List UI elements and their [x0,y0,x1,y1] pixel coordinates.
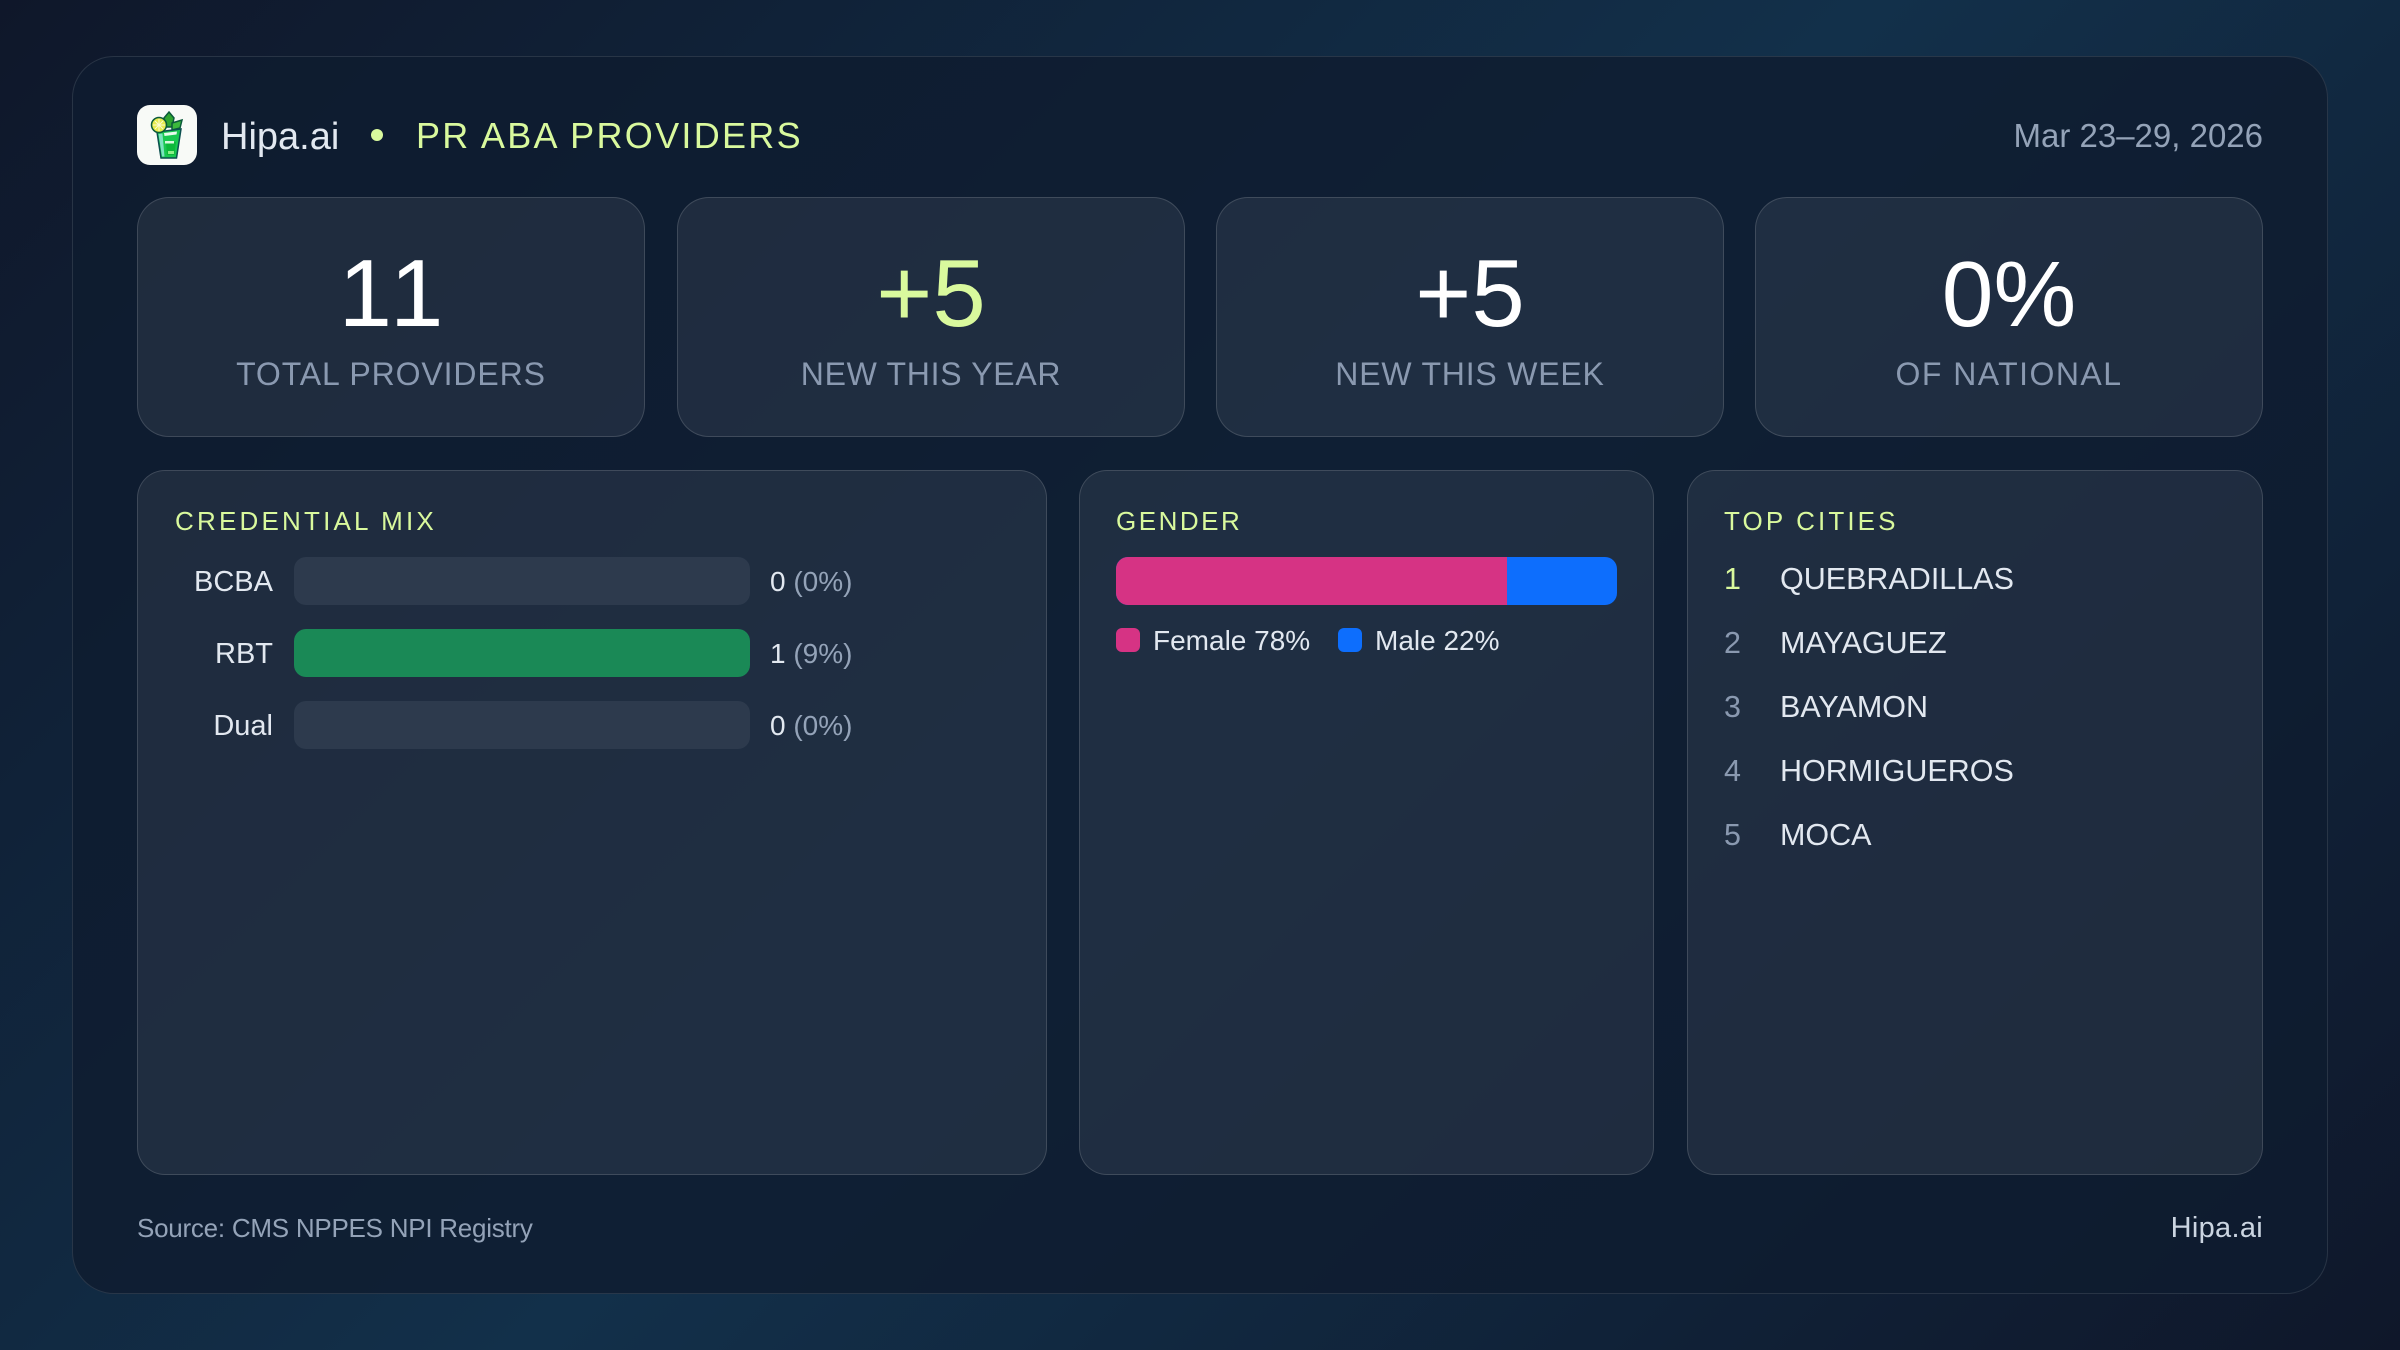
label: NEW THIS WEEK [1335,356,1605,392]
KPI: new this year [677,197,1185,437]
panel: credential mix [137,470,1047,1175]
bar row: Dual: Dual [213,710,273,742]
value: +5 [1415,240,1525,347]
heading: top cities: TOP CITIES [1724,506,1899,536]
city list [1724,562,2014,852]
city 3: 3 [1724,690,1741,724]
bar row: BCBA: 0 (0%) [770,566,852,597]
panel: gender [1079,470,1654,1175]
KPI: total providers [137,197,645,437]
city 2: 2 [1724,626,1741,660]
footer brand: Hipa.ai [2171,1212,2263,1244]
bar row: Dual: 0 (0%) [770,710,852,741]
dashboard title: PR ABA PROVIDERS [416,115,803,156]
bar row: BCBA [194,557,852,605]
legend: male: Male 22% [1375,625,1500,656]
bar row: RBT: RBT [215,638,273,670]
bar row: Dual [213,701,852,749]
icon: mojito glass logo [137,105,197,165]
city 5: MOCA [1780,818,1872,852]
bar row: RBT [215,629,852,677]
bar row: RBT: 1 (9%) [770,638,852,669]
date range: Mar 23–29, 2026 [2013,117,2263,154]
label: TOTAL PROVIDERS [236,356,546,392]
bullet [371,129,383,141]
city 1: QUEBRADILLAS [1780,562,2014,596]
footer source: Source: CMS NPPES NPI Registry [137,1213,533,1243]
legend: female: Female 78% [1153,625,1310,656]
city 5: 5 [1724,818,1741,852]
KPI: percent of national [1755,197,2263,437]
value: 0% [1942,242,2076,346]
KPI: new this week [1216,197,1724,437]
panel: top cities [1687,470,2263,1175]
city 1: 1 [1724,562,1741,596]
value: +5 [876,240,986,347]
header [137,105,2263,165]
city 4: 4 [1724,754,1741,788]
label: OF NATIONAL [1896,356,2122,392]
city 2: MAYAGUEZ [1780,626,1947,660]
city 5 [1724,818,1872,852]
heading: gender: GENDER [1116,506,1242,536]
value: 11 [339,240,441,347]
brand name: Hipa.ai [221,116,339,158]
bar row: BCBA: BCBA [194,566,273,598]
heading: credential mix: CREDENTIAL MIX [175,506,437,536]
city 3: BAYAMON [1780,690,1928,724]
city 4: HORMIGUEROS [1780,754,2014,788]
label: NEW THIS YEAR [801,356,1061,392]
stacked bar: gender split [1116,557,1617,605]
